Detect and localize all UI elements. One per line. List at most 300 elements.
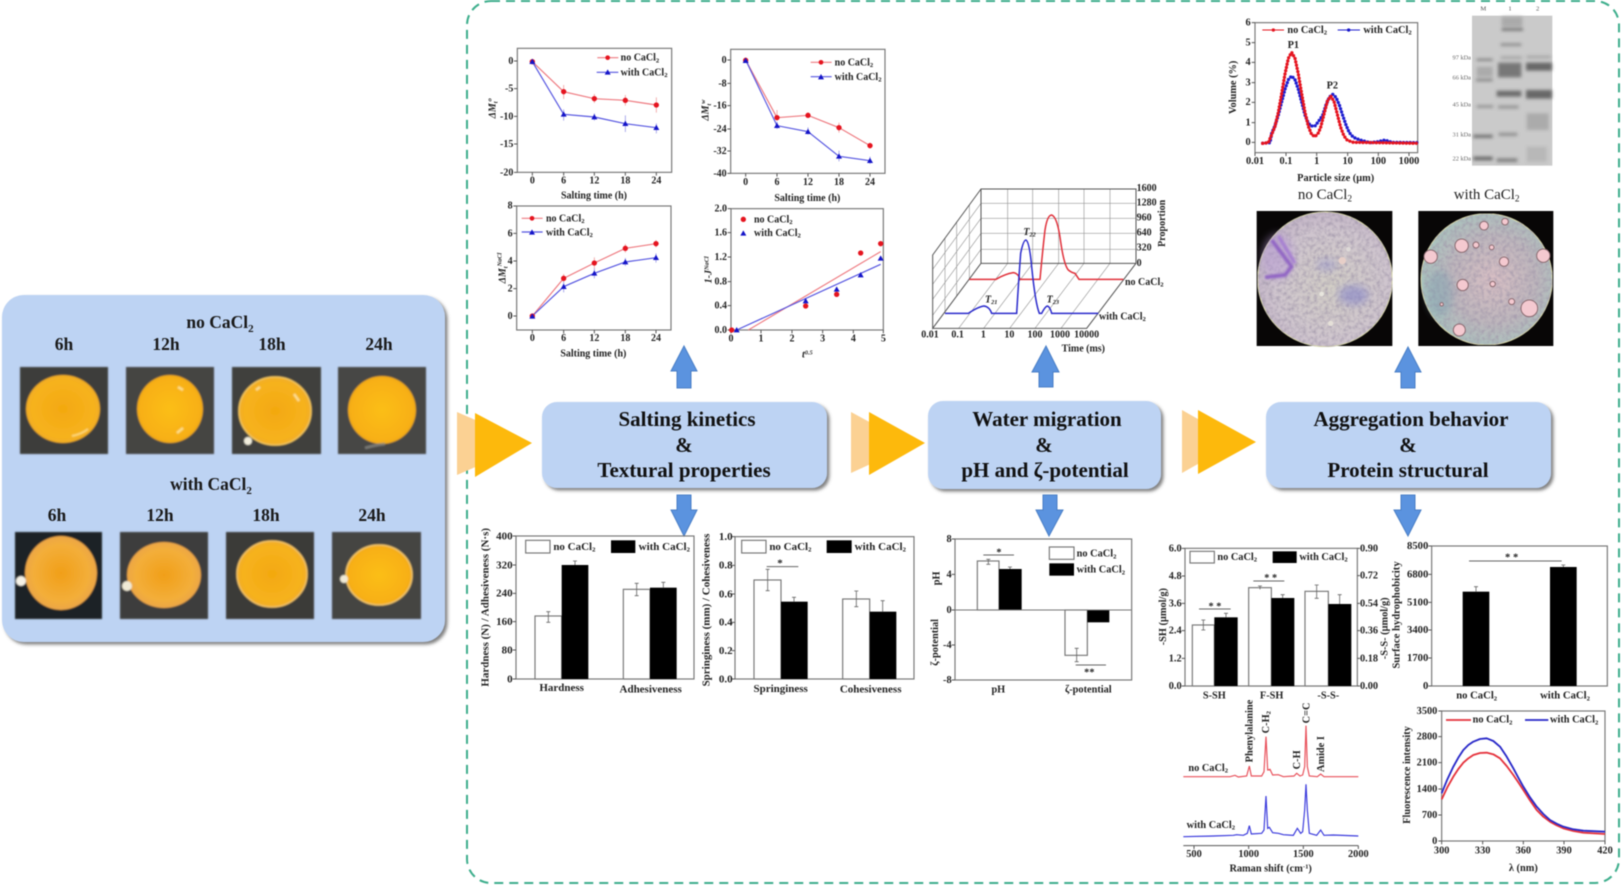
chart: pH and zeta potential bars: 2 — [1122, 569, 1126, 576]
chart: fluorescence spectra: 2100 — [1417, 758, 1437, 769]
chart: LF-NMR T2 relaxation 3D plot: T — [1023, 227, 1029, 238]
chart: salt flux linear fit: 2 — [789, 334, 794, 345]
row labels: no CaCl2 times: 12h — [152, 334, 180, 354]
chart: NaCl mass change: 0 — [508, 311, 513, 322]
chart: pH and zeta potential bars: with CaCl — [1077, 565, 1122, 576]
chart: LF-NMR T2 relaxation 3D plot: with CaCl — [1099, 311, 1143, 322]
panel title: aggregation behavior and protein structural: Protein structural — [1327, 458, 1489, 482]
chart: particle size distribution — [1228, 17, 1419, 184]
chart: NaCl mass change: with CaCl — [546, 227, 590, 238]
chart: hardness and adhesiveness bars: Hardness (N) / Adhesiveness (N·s) — [479, 528, 491, 687]
chart: water mass change: no CaCl — [835, 57, 870, 68]
chart: Raman spectra: 1500 — [1293, 849, 1314, 860]
chart: surface hydrophobicity bars: 3400 — [1407, 625, 1428, 636]
chart: springiness and cohesiveness bars: 2 — [903, 547, 907, 554]
arrow: up to kinetics charts — [671, 346, 697, 388]
chart: springiness and cohesiveness bars: 0.2 — [719, 645, 733, 657]
row labels: with CaCl2 times: 6h — [48, 505, 67, 525]
photo: no CaCl2 6h yolk — [20, 367, 108, 454]
chart: springiness and cohesiveness bars: 1.0 — [719, 531, 733, 543]
chart: SH and SS content bars: 3.6 — [1169, 598, 1182, 609]
chart: SH and SS content bars: 4.8 — [1169, 571, 1182, 582]
chart: fluorescence spectra: no CaCl — [1473, 715, 1509, 726]
photo: with CaCl2 12h yolk — [120, 532, 208, 619]
chart: LF-NMR T2 relaxation 3D plot: 320 — [1137, 242, 1152, 253]
chart: LF-NMR T2 relaxation 3D plot: 0 — [1137, 258, 1142, 269]
chart: LF-NMR T2 relaxation 3D plot: 2 — [1160, 282, 1164, 289]
chart: Raman spectra: Amide I — [1316, 736, 1327, 772]
chart: SH and SS content bars: 1.2 — [1169, 653, 1182, 664]
chart: total mass change: -10 — [500, 111, 513, 122]
chart: total mass change: 24 — [651, 176, 661, 187]
chart: particle size distribution: no CaCl — [1287, 25, 1324, 36]
panel title: water migration and pH and zeta potential: pH and ζ-potential — [961, 458, 1129, 482]
chart: SH and SS content bars: 0.18 — [1360, 653, 1378, 664]
chart: total mass change: no CaCl — [621, 53, 656, 64]
chart: pH and zeta potential bars: * — [996, 548, 1002, 559]
chart: NaCl mass change: 4 — [508, 256, 513, 267]
chart: SH and SS content bars: 2.4 — [1169, 626, 1182, 637]
chart: springiness and cohesiveness bars: 2 — [808, 547, 812, 554]
chart: springiness and cohesiveness bars: Cohesiveness — [840, 683, 901, 695]
chart: water mass change: -8 — [718, 78, 727, 89]
chart: particle size distribution: 2 — [1408, 30, 1412, 37]
chart: SH and SS content bars: * * — [1209, 601, 1221, 612]
chart: salt flux linear fit: 0 — [728, 334, 733, 345]
chart: total mass change: 0 — [508, 56, 513, 67]
image: SDS-PAGE gel: M — [1480, 6, 1486, 13]
chart: NaCl mass change — [497, 201, 671, 360]
photo: with CaCl2 24h yolk — [332, 532, 421, 619]
chart: salt flux linear fit: no CaCl — [754, 214, 789, 225]
chart: water mass change: Salting time (h) — [774, 193, 840, 204]
chart: fluorescence spectra: 3500 — [1417, 706, 1437, 717]
chart: SH and SS content bars: 2 — [1344, 557, 1348, 564]
chart: LF-NMR T2 relaxation 3D plot: 1600 — [1137, 183, 1157, 194]
chart: fluorescence spectra: 1400 — [1417, 784, 1437, 795]
chart: total mass change: 0 — [530, 176, 535, 187]
chart: hardness and adhesiveness bars — [479, 528, 694, 695]
chart: pH and zeta potential bars: no CaCl — [1077, 549, 1113, 560]
chart: springiness and cohesiveness bars: 0.4 — [719, 617, 733, 629]
chart: particle size distribution: Particle size (μm) — [1297, 173, 1374, 184]
heading: with CaCl2: with CaCl — [170, 474, 246, 494]
row labels: with CaCl2 times — [48, 505, 386, 525]
chart: total mass change: t — [493, 101, 500, 103]
chart: NaCl mass change: 12 — [589, 333, 599, 344]
chart: LF-NMR T2 relaxation 3D plot: 640 — [1137, 228, 1152, 239]
panel title: aggregation behavior and protein structural: Aggregation behavior — [1313, 407, 1509, 431]
chart: pH and zeta potential bars: 0 — [946, 605, 952, 616]
chart: NaCl mass change: 2 — [508, 284, 513, 295]
chart: surface hydrophobicity bars: with CaCl — [1540, 691, 1587, 702]
chart: LF-NMR T2 relaxation 3D plot: 1000 — [1050, 330, 1070, 341]
chart: fluorescence spectra: 700 — [1422, 810, 1437, 821]
chart: Raman spectra: Raman shift (cm — [1229, 864, 1303, 875]
chart: water mass change: -40 — [713, 168, 727, 179]
chart: springiness and cohesiveness bars: with CaCl — [855, 541, 903, 553]
photo: with CaCl2 6h yolk — [15, 532, 102, 619]
chart: water mass change: -24 — [713, 124, 727, 135]
chart: fluorescence spectra: 390 — [1556, 845, 1572, 856]
chart: water mass change: with CaCl — [835, 72, 878, 83]
chart: hardness and adhesiveness bars: 160 — [496, 616, 513, 628]
chart: LF-NMR T2 relaxation 3D plot: 0.1 — [951, 330, 964, 341]
chart: water mass change: 18 — [834, 177, 844, 188]
chart: water mass change: ΔM — [701, 106, 712, 121]
chart: pH and zeta potential bars: ** — [1084, 668, 1094, 679]
arrow: up to LF-NMR chart — [1032, 346, 1059, 387]
chart: fluorescence spectra: λ (nm) — [1509, 863, 1538, 874]
chart: NaCl mass change: 6 — [508, 228, 513, 239]
chart: SH and SS content bars: 2 — [1254, 557, 1258, 564]
chart: LF-NMR T2 relaxation 3D plot: T — [985, 294, 991, 305]
chart: total mass change: o — [487, 98, 494, 101]
chart: NaCl mass change: 24 — [651, 333, 661, 344]
panel title: water migration and pH and zeta potential: Water migration — [972, 407, 1122, 431]
chart: particle size distribution: 1000 — [1399, 156, 1419, 167]
image: SDS-PAGE gel: 66 kDa — [1453, 74, 1471, 81]
chart: water mass change: 24 — [865, 177, 875, 188]
chart: total mass change: 12 — [589, 176, 599, 187]
chart: NaCl mass change: 6 — [561, 333, 566, 344]
chart: hardness and adhesiveness bars: 80 — [502, 644, 513, 656]
chart: salt flux linear fit: 4 — [851, 334, 856, 345]
chart: salt flux linear fit: 3 — [820, 334, 825, 345]
panel title: water migration and pH and zeta potential: & — [1035, 433, 1053, 457]
chart: SH and SS content bars: 0.00 — [1360, 681, 1378, 692]
chart: hardness and adhesiveness bars: 2 — [687, 547, 691, 554]
photo: no CaCl2 18h yolk — [232, 367, 321, 454]
chart: surface hydrophobicity bars: 8500 — [1407, 541, 1428, 552]
chart: springiness and cohesiveness bars — [701, 531, 914, 695]
panel title: aggregation behavior and protein structural: & — [1399, 433, 1417, 457]
chart: fluorescence spectra: 0 — [1432, 836, 1437, 847]
row labels: no CaCl2 times: 6h — [55, 334, 74, 354]
chart: NaCl mass change: 2 — [590, 232, 594, 239]
chart: salt flux linear fit: 1.2 — [715, 252, 727, 263]
chart: Raman spectra: C-H — [1292, 750, 1303, 769]
chart: fluorescence spectra: 420 — [1597, 845, 1613, 856]
chart: LF-NMR T2 relaxation 3D plot: 1280 — [1137, 198, 1157, 209]
chart: water mass change: 12 — [803, 177, 813, 188]
image: SDS-PAGE gel: 2 — [1536, 6, 1539, 13]
chart: SH and SS content bars: 0.72 — [1360, 571, 1378, 582]
chart: LF-NMR T2 relaxation 3D plot: 2 — [1143, 316, 1147, 323]
chart: water mass change: -16 — [713, 101, 727, 112]
dashed frame: analysis results — [467, 1, 1619, 883]
chart: salt flux linear fit: 2 — [789, 219, 793, 226]
chart: fluorescence spectra: 2800 — [1417, 732, 1437, 743]
chart: pH and zeta potential bars: -4 — [943, 640, 952, 651]
chart: particle size distribution: Volume (%) — [1228, 61, 1239, 114]
chart: fluorescence spectra: 330 — [1475, 845, 1490, 856]
arrow: down to texture bars — [671, 495, 697, 536]
chart: NaCl mass change: ΔM — [497, 268, 508, 283]
heading: no CaCl2: 2 — [248, 323, 254, 335]
chart: hardness and adhesiveness bars: no CaCl — [553, 541, 592, 553]
chart: particle size distribution: 2 — [1324, 30, 1328, 37]
image: SDS-PAGE gel: 31 kDa — [1453, 132, 1471, 139]
chart: particle size distribution: 100 — [1371, 156, 1386, 167]
chart: SH and SS content bars: 0.90 — [1360, 543, 1378, 554]
label: no CaCl2 micrograph: 2 — [1347, 194, 1352, 204]
label: with CaCl2 micrograph: 2 — [1515, 194, 1520, 204]
chart: surface hydrophobicity bars: * * — [1505, 553, 1518, 564]
chart: fluorescence spectra: 2 — [1509, 719, 1513, 726]
chart: Raman spectra: C-H — [1261, 714, 1272, 733]
chart: particle size distribution: P1 — [1288, 40, 1299, 51]
chart: Raman spectra: -1 — [1303, 864, 1308, 871]
chart: SH and SS content bars: no CaCl — [1217, 552, 1254, 563]
chart: pH and zeta potential bars: 8 — [946, 534, 952, 545]
chart: water mass change: 6 — [774, 177, 779, 188]
chart: LF-NMR T2 relaxation 3D plot: 21 — [990, 299, 997, 306]
panel title: salting kinetics and textural properties: Salting kinetics — [618, 407, 756, 431]
chart: SH and SS content bars: S-SH — [1203, 690, 1226, 701]
image: SDS-PAGE gel: 22 kDa — [1453, 156, 1471, 163]
chart: total mass change: 18 — [620, 176, 630, 187]
chart: salt flux linear fit: 1 — [758, 334, 763, 345]
chart: surface hydrophobicity bars: 5100 — [1407, 597, 1428, 608]
chart: hardness and adhesiveness bars: 2 — [592, 547, 596, 554]
chart: particle size distribution: 0.1 — [1280, 156, 1292, 167]
chart: LF-NMR T2 relaxation 3D plot: 1 — [981, 330, 986, 341]
arrow: yellow flow 2 — [851, 412, 925, 475]
chart: Raman spectra: 2 — [1225, 768, 1229, 775]
chart: total mass change: 2 — [656, 57, 660, 64]
chart: total mass change: -5 — [505, 84, 513, 95]
chart: NaCl mass change: 2 — [581, 218, 585, 225]
chart: SH and SS content bars: -S-S- — [1317, 690, 1340, 701]
chart: Raman spectra: C=C — [1301, 703, 1312, 723]
row labels: no CaCl2 times: 18h — [258, 334, 286, 354]
chart: NaCl mass change: no CaCl — [546, 213, 581, 224]
chart: surface hydrophobicity bars: 2 — [1587, 695, 1591, 702]
chart: fluorescence spectra: 360 — [1516, 845, 1531, 856]
chart: LF-NMR T2 relaxation 3D plot: 22 — [1028, 232, 1037, 239]
chart: LF-NMR T2 relaxation 3D plot: T — [1047, 294, 1053, 305]
chart: particle size distribution: 5 — [1245, 37, 1251, 48]
photo: no CaCl2 24h yolk — [338, 367, 426, 454]
chart: fluorescence spectra: 300 — [1434, 845, 1449, 856]
chart: particle size distribution: 1 — [1245, 117, 1251, 128]
chart: total mass change: ΔM — [487, 103, 498, 118]
chart: LF-NMR T2 relaxation 3D plot: 100 — [1028, 330, 1042, 341]
label: no CaCl2 micrograph: no CaCl — [1298, 187, 1347, 203]
chart: pH and zeta potential bars: pH — [931, 571, 942, 585]
heading: no CaCl2: no CaCl — [186, 312, 248, 332]
chart: Raman spectra: ) — [1308, 864, 1312, 875]
chart: water mass change: 0 — [743, 177, 748, 188]
chart: Raman spectra: Phenylalanine — [1245, 699, 1256, 762]
chart: water mass change: 0 — [722, 55, 727, 66]
chart: LF-NMR T2 relaxation 3D plot: Time (ms) — [1062, 344, 1105, 355]
chart: LF-NMR T2 relaxation 3D plot: 23 — [1052, 299, 1059, 306]
label: with CaCl2 micrograph: with CaCl — [1454, 187, 1515, 203]
chart: salt flux linear fit: with CaCl — [754, 228, 798, 239]
chart: LF-NMR T2 relaxation 3D plot: Proportion — [1157, 199, 1168, 247]
chart: particle size distribution: 10 — [1343, 156, 1353, 167]
chart: SH and SS content bars: 0.36 — [1360, 626, 1378, 637]
chart: hardness and adhesiveness bars: 400 — [496, 530, 513, 542]
chart: salt flux linear fit: 0.8 — [715, 277, 727, 288]
chart: springiness and cohesiveness bars: * — [777, 558, 783, 570]
panel: egg yolk photographs — [2, 295, 445, 642]
arrow: down to pH bars — [1036, 495, 1063, 536]
chart: salt flux linear fit: 0.5 — [805, 349, 813, 356]
chart: pH and zeta potential bars: pH — [991, 685, 1005, 696]
panel title: water migration and pH and zeta potential — [928, 401, 1161, 489]
image: SDS-PAGE gel: 1 — [1508, 6, 1512, 13]
chart: SH and SS content bars — [1158, 543, 1390, 701]
chart: pH and zeta potential bars: 2 — [1113, 553, 1117, 560]
photo: with CaCl2 18h yolk — [226, 532, 314, 619]
chart: salt flux linear fit — [703, 204, 886, 360]
chart: LF-NMR T2 relaxation 3D plot: 960 — [1137, 213, 1152, 224]
chart: hardness and adhesiveness bars: Hardness — [539, 682, 584, 694]
chart: springiness and cohesiveness bars: no CaCl — [769, 541, 808, 553]
chart: surface hydrophobicity bars: Surface hydrophobicity — [1391, 561, 1402, 669]
chart: particle size distribution: 1 — [1314, 156, 1319, 167]
chart: NaCl mass change: NaCl — [497, 252, 504, 267]
chart: springiness and cohesiveness bars: 0.6 — [719, 588, 733, 600]
image: SDS-PAGE gel: 45 kDa — [1453, 102, 1471, 109]
chart: salt flux linear fit: t — [802, 349, 805, 360]
row labels: with CaCl2 times: 24h — [358, 505, 386, 525]
chart: Raman spectra: 1000 — [1238, 849, 1259, 860]
chart: pH and zeta potential bars: 4 — [946, 569, 952, 580]
arrow: yellow flow 3 — [1182, 410, 1256, 474]
panel title: aggregation behavior and protein structural — [1266, 402, 1551, 488]
chart: water mass change: t — [706, 104, 713, 106]
image: SDS-PAGE gel: 97 kDa — [1453, 54, 1471, 61]
chart: LF-NMR T2 relaxation 3D plot: 10 — [1004, 330, 1014, 341]
chart: SH and SS content bars: 0.54 — [1360, 598, 1378, 609]
chart: Raman spectra: 2000 — [1348, 849, 1369, 860]
chart: LF-NMR T2 relaxation 3D plot: 10000 — [1074, 330, 1099, 341]
chart: pH and zeta potential bars: ζ-potential — [930, 619, 941, 666]
chart: particle size distribution: P2 — [1327, 80, 1338, 91]
chart: surface hydrophobicity bars — [1391, 541, 1607, 702]
chart: Raman spectra: 2 — [1266, 710, 1273, 714]
image: micrograph with CaCl2 — [1418, 211, 1553, 346]
chart: fluorescence spectra: 2 — [1595, 719, 1599, 726]
chart: particle size distribution: 4 — [1245, 57, 1251, 68]
chart: total mass change — [487, 48, 672, 202]
chart: SH and SS content bars: 6.0 — [1169, 543, 1182, 554]
chart: SH and SS content bars: -SH (μmol/g) — [1158, 588, 1169, 645]
chart: salt flux linear fit: NaCl — [703, 256, 710, 271]
chart: Raman spectra: no CaCl — [1188, 763, 1225, 774]
row labels: with CaCl2 times: 12h — [146, 505, 174, 525]
heading: with CaCl2: 2 — [246, 485, 252, 497]
chart: NaCl mass change: t — [503, 266, 510, 268]
image: SDS-PAGE gel — [1453, 6, 1552, 166]
chart: surface hydrophobicity bars: no CaCl — [1456, 691, 1494, 702]
chart: water mass change — [700, 49, 885, 204]
arrow: up to aggregation images — [1395, 347, 1421, 388]
panel title: salting kinetics and textural properties: & — [675, 433, 693, 457]
chart: hardness and adhesiveness bars: 0 — [507, 673, 513, 685]
row labels: no CaCl2 times: 24h — [365, 334, 393, 354]
chart: hardness and adhesiveness bars: 320 — [496, 559, 513, 571]
chart: hardness and adhesiveness bars: Adhesiveness — [620, 683, 682, 695]
chart: LF-NMR T2 relaxation 3D plot — [921, 183, 1168, 355]
chart: hardness and adhesiveness bars: with CaCl — [639, 541, 687, 553]
chart: Raman spectra: 500 — [1186, 849, 1202, 860]
chart: SH and SS content bars: -S-S- (μmol/g) — [1379, 597, 1390, 659]
chart: total mass change: with CaCl — [621, 67, 664, 78]
chart: water mass change: 2 — [878, 77, 882, 84]
chart: salt flux linear fit: 1.6 — [715, 228, 727, 239]
chart: fluorescence spectra — [1402, 706, 1613, 874]
chart: salt flux linear fit: 1-J — [703, 270, 714, 283]
chart: total mass change: 6 — [561, 176, 566, 187]
chart: NaCl mass change: 0 — [530, 333, 535, 344]
chart: water mass change: -32 — [713, 146, 727, 157]
panel title: salting kinetics and textural properties — [542, 402, 827, 488]
chart: particle size distribution: 3 — [1245, 77, 1251, 88]
chart: SH and SS content bars: * * — [1264, 573, 1277, 584]
chart: surface hydrophobicity bars: 6800 — [1407, 569, 1428, 580]
chart: NaCl mass change: 8 — [508, 201, 513, 212]
chart: particle size distribution: 2 — [1245, 97, 1251, 108]
panel title: salting kinetics and textural properties: Textural properties — [597, 458, 771, 482]
arrow: yellow flow 1 — [457, 412, 532, 477]
chart: LF-NMR T2 relaxation 3D plot: no CaCl — [1125, 277, 1160, 288]
chart: particle size distribution: with CaCl — [1363, 25, 1408, 36]
chart: salt flux linear fit: 2 — [798, 233, 802, 240]
row labels: no CaCl2 times — [55, 334, 393, 354]
chart: fluorescence spectra: Fluorescence intensity — [1402, 725, 1413, 824]
photo: no CaCl2 12h yolk — [126, 367, 214, 454]
chart: particle size distribution: 0 — [1245, 137, 1251, 148]
chart: salt flux linear fit: 5 — [881, 334, 886, 345]
chart: total mass change: 2 — [664, 72, 668, 79]
chart: total mass change: -20 — [500, 167, 513, 178]
chart: total mass change: Salting time (h) — [561, 191, 627, 202]
chart: springiness and cohesiveness bars: Springiness (mm) / Cohesiveness — [701, 534, 713, 686]
chart: springiness and cohesiveness bars: 0.8 — [719, 560, 733, 572]
chart: fluorescence spectra: with CaCl — [1550, 715, 1595, 726]
chart: SH and SS content bars: with CaCl — [1299, 552, 1344, 563]
chart: pH and zeta potential bars: -8 — [943, 675, 952, 686]
chart: NaCl mass change: 18 — [620, 333, 630, 344]
chart: hardness and adhesiveness bars: 240 — [496, 588, 513, 600]
chart: salt flux linear fit: 0.0 — [715, 325, 727, 336]
chart: water mass change: 2 — [870, 62, 874, 69]
row labels: with CaCl2 times: 18h — [252, 505, 280, 525]
chart: pH and zeta potential bars: ζ-potential — [1065, 685, 1112, 696]
chart: LF-NMR T2 relaxation 3D plot: 0.01 — [921, 330, 939, 341]
chart: springiness and cohesiveness bars: Springiness — [753, 683, 808, 695]
chart: salt flux linear fit: 0.4 — [715, 301, 727, 312]
chart: NaCl mass change: Salting time (h) — [560, 349, 626, 360]
chart: water mass change: w — [700, 99, 707, 104]
chart: Raman spectra: with CaCl — [1187, 820, 1232, 831]
chart: Raman spectra — [1183, 699, 1369, 875]
chart: total mass change: -15 — [500, 139, 513, 150]
chart: Raman spectra: 2 — [1232, 825, 1236, 832]
chart: particle size distribution: 6 — [1245, 17, 1251, 28]
chart: springiness and cohesiveness bars: 0.0 — [719, 673, 733, 685]
arrow: down to protein charts — [1394, 495, 1421, 536]
chart: surface hydrophobicity bars: 0 — [1423, 681, 1428, 692]
image: micrograph no CaCl2 — [1257, 211, 1392, 347]
chart: SH and SS content bars: 0.0 — [1169, 681, 1182, 692]
chart: salt flux linear fit: 2.0 — [715, 204, 727, 215]
